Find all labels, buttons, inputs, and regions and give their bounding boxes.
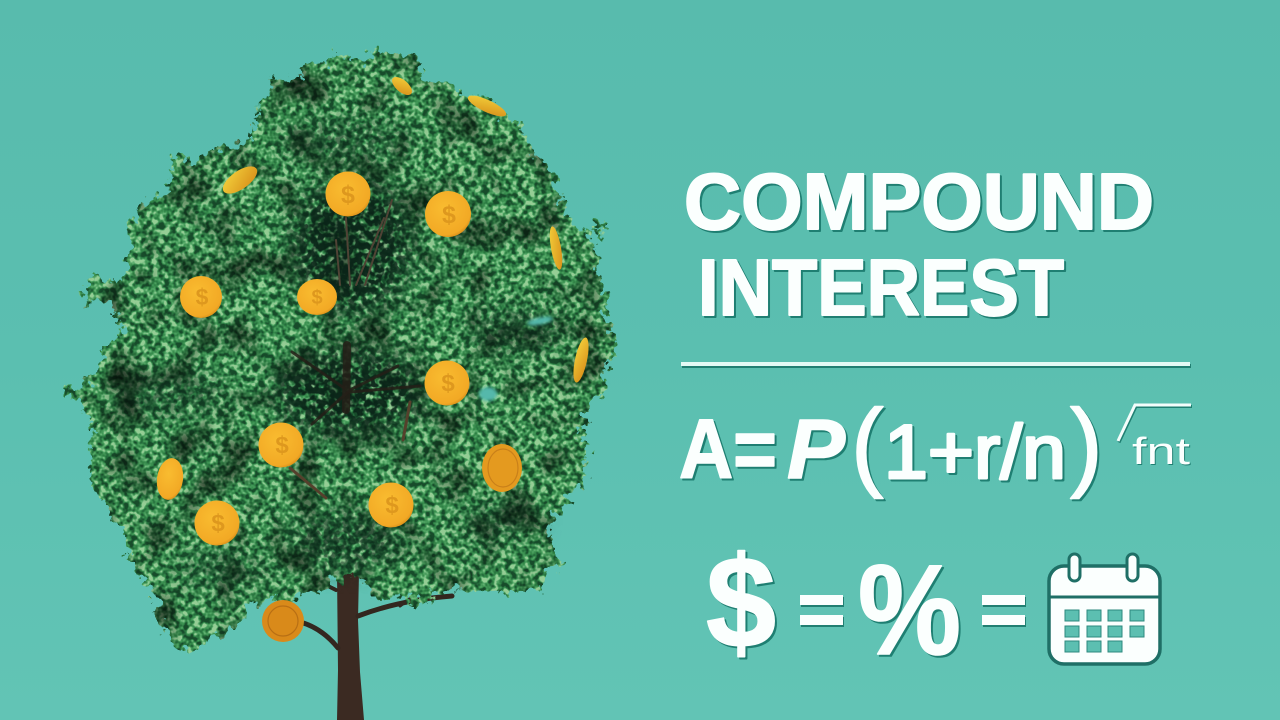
formula: one plus r over n: 1+r/n [884, 410, 1066, 495]
lower branches [300, 570, 452, 648]
coin [326, 172, 370, 216]
coin [368, 482, 414, 528]
tree canopy [69, 56, 621, 653]
icon: dollar sign: $ [706, 529, 776, 675]
formula: A equals: A= [679, 402, 777, 496]
coin [258, 422, 304, 468]
fine upper branches [336, 200, 392, 285]
coin [424, 360, 470, 406]
coin [194, 500, 240, 546]
formula: radical exponent: fnt [1133, 432, 1192, 474]
icon: calendar [1049, 554, 1160, 664]
coin: $ [442, 201, 456, 229]
coin [425, 191, 471, 237]
symbol row: money, rate, time [706, 529, 1160, 684]
sky gaps in canopy [479, 315, 553, 401]
coin [297, 279, 337, 315]
coin: $ [311, 287, 323, 309]
coin: tilted left [154, 456, 186, 502]
coin: $ [441, 370, 455, 397]
brown side branches [290, 402, 410, 498]
coin: $ [196, 284, 209, 310]
title line 2 shadow: INTEREST [700, 245, 1066, 334]
formula shadow: ( [853, 391, 886, 501]
formula: close paren: ) [1070, 389, 1103, 499]
title line 2: INTEREST [698, 243, 1064, 332]
formula shadow: ) [1072, 391, 1105, 501]
canopy shading [110, 122, 565, 586]
coin: tilted top left [218, 161, 262, 199]
formula: P: P [787, 402, 846, 496]
formula: radical exponent [1118, 405, 1192, 474]
title [684, 157, 1156, 334]
title line 1: COMPOUND [684, 157, 1154, 246]
formula: radical exponent: fnt [1132, 431, 1191, 473]
formula shadow [681, 391, 1105, 501]
coin: $ [341, 181, 355, 209]
icon: percent sign: % [858, 539, 961, 682]
inner branches [292, 345, 420, 424]
coin [262, 600, 304, 642]
coin [482, 444, 522, 492]
coin [180, 276, 222, 318]
formula shadow: A= [681, 404, 779, 498]
title line 1 shadow: COMPOUND [686, 159, 1156, 248]
icon: equals two [982, 595, 1026, 627]
formula [679, 389, 1192, 501]
coin: edge far right [570, 336, 592, 384]
formula shadow: 1+r/n [886, 412, 1068, 497]
illustration: money tree [69, 56, 621, 720]
divider line [681, 362, 1191, 368]
formula shadow: P [789, 404, 848, 498]
coin: edge right [547, 225, 565, 271]
coin: tilted top right [465, 92, 509, 120]
coin: tilted top [389, 74, 415, 98]
coin: $ [275, 432, 289, 459]
icon: dollar sign: $ [708, 531, 778, 677]
icon: equals one [800, 595, 844, 627]
tree trunk [337, 572, 364, 720]
coin: $ [385, 492, 399, 519]
icon: percent sign: % [860, 541, 963, 684]
gold coins [154, 74, 592, 642]
coin: $ [211, 510, 225, 537]
formula: open paren: ( [851, 389, 884, 499]
